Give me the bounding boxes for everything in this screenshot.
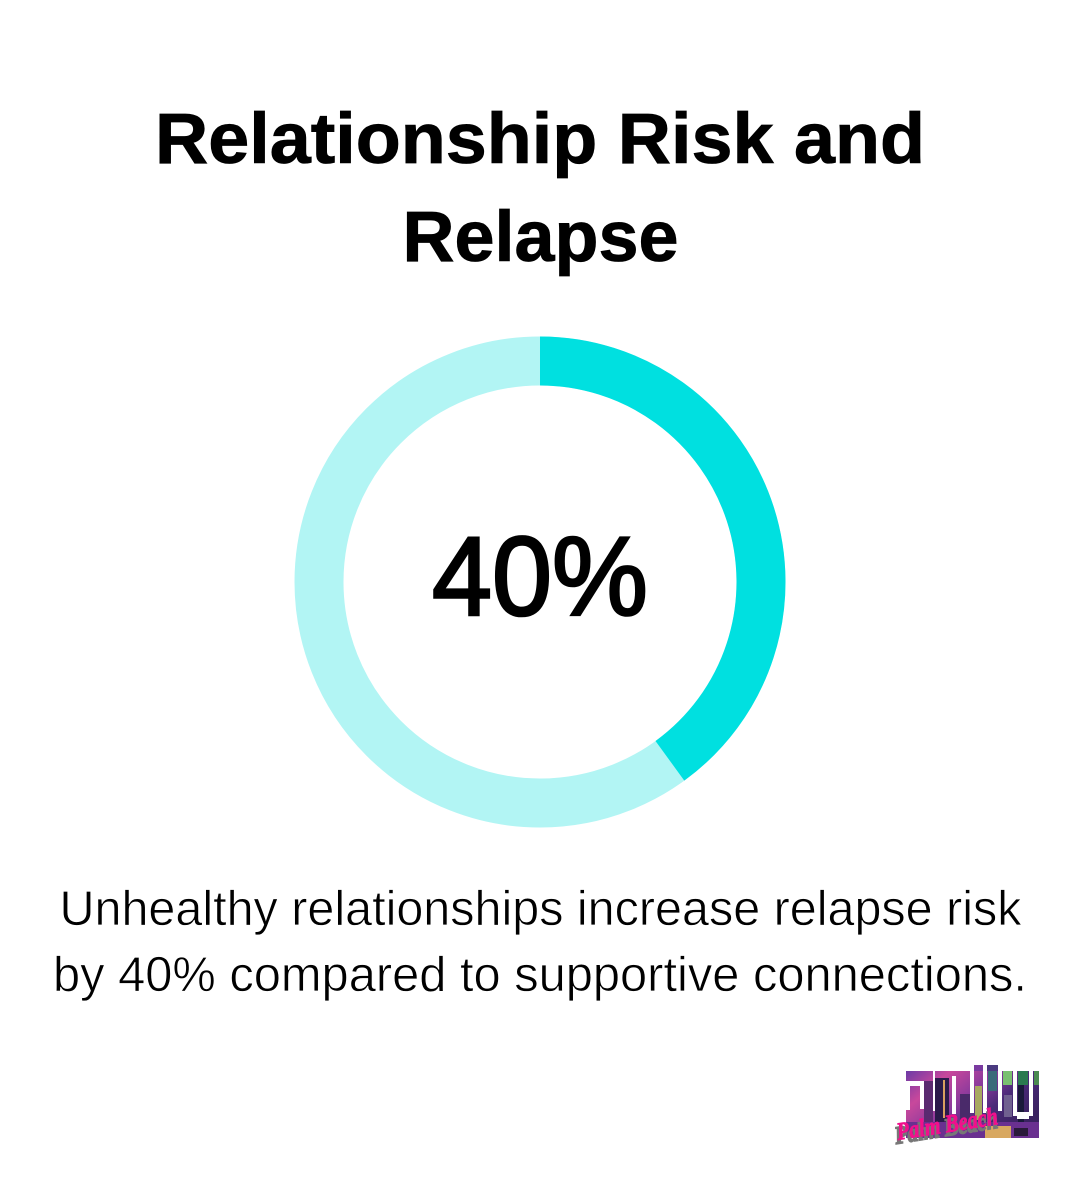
description text: by 40% compared to supportive connections. xyxy=(53,948,1027,1002)
title: Relationship Risk and xyxy=(155,100,925,179)
title xyxy=(155,100,925,277)
donut chart: 40% xyxy=(319,361,761,803)
donut track xyxy=(319,361,761,803)
donut centre value: 40% xyxy=(432,514,648,639)
donut value arc xyxy=(540,361,761,761)
logo letter slits xyxy=(906,1065,1033,1119)
description text xyxy=(53,882,1027,1002)
logo: amity Palm Beach xyxy=(892,1065,1039,1150)
logo script text: Palm Beach xyxy=(892,1107,1000,1150)
description text: Unhealthy relationships increase relapse risk xyxy=(60,882,1022,936)
logo script text: Palm Beach xyxy=(894,1103,1000,1146)
title: Relapse xyxy=(402,198,678,277)
